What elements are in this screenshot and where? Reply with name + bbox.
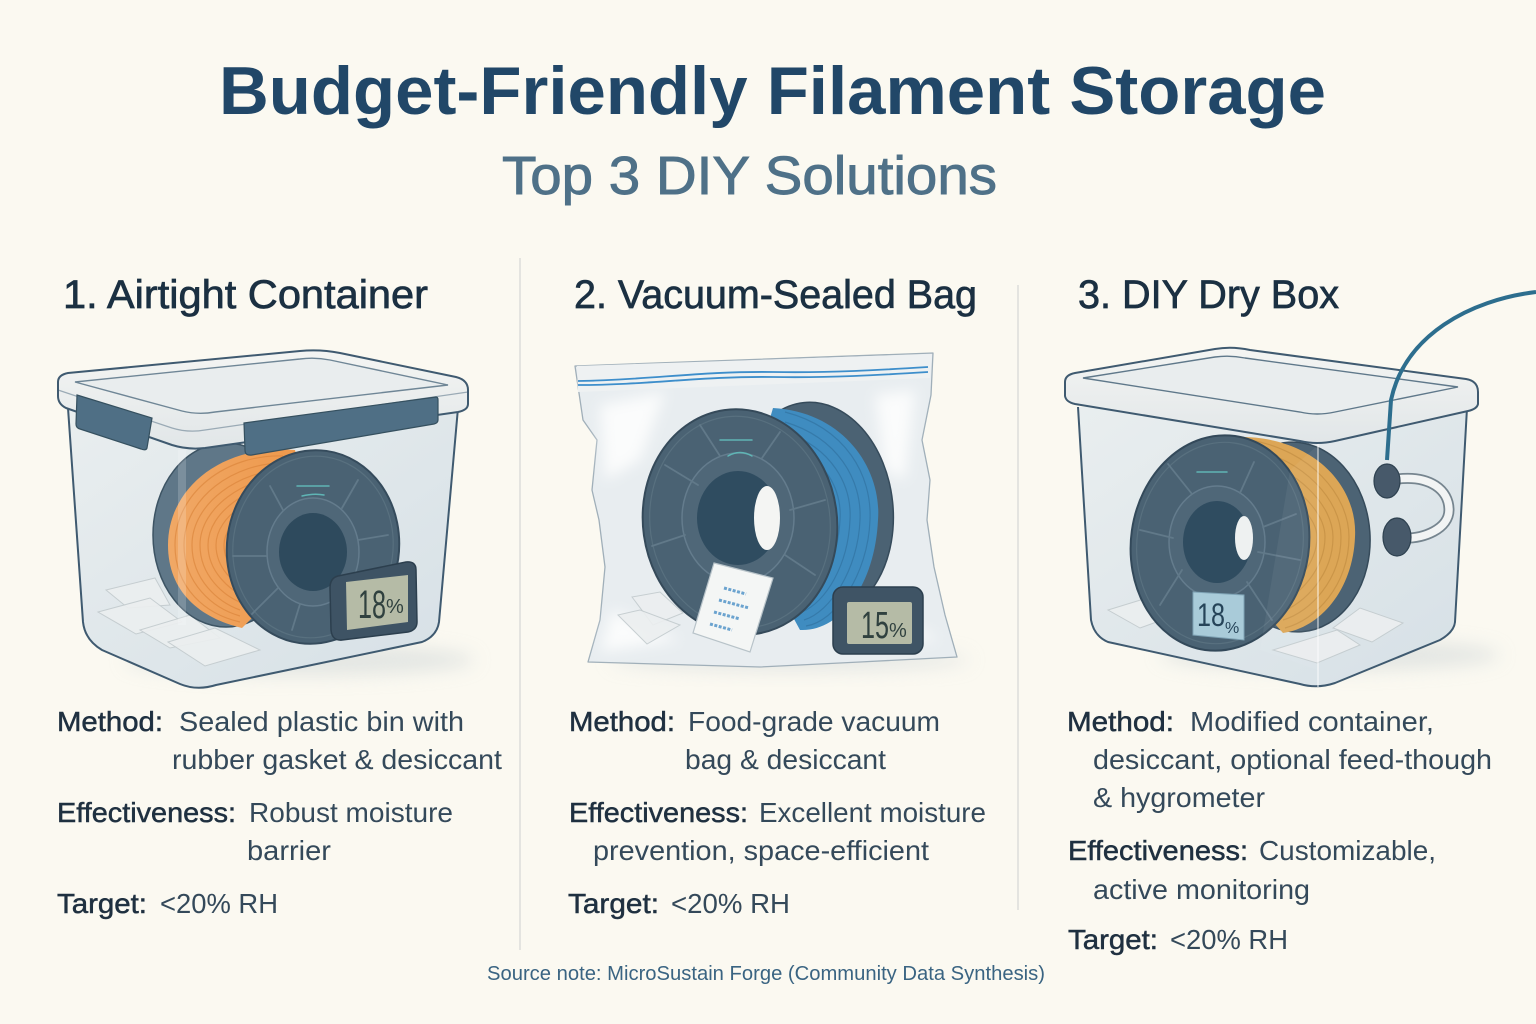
effectiveness text: Effectiveness: bbox=[57, 797, 236, 828]
effectiveness text bbox=[57, 797, 453, 866]
effectiveness text bbox=[569, 797, 986, 866]
effectiveness text bbox=[1068, 835, 1436, 905]
hygrometer: 15% bbox=[833, 587, 923, 654]
effectiveness text: Robust moisture bbox=[249, 797, 453, 828]
illustration: dry box with yellow spool bbox=[1065, 292, 1536, 687]
large desiccant pack bbox=[693, 563, 773, 652]
clasp: left bbox=[76, 395, 152, 450]
method text: Modified container, bbox=[1190, 706, 1434, 737]
heading: DIY dry box: 3. DIY Dry Box bbox=[1078, 273, 1339, 317]
method text: Food-grade vacuum bbox=[688, 706, 940, 737]
heading: vacuum-sealed bag: 2. Vacuum-Sealed Bag bbox=[574, 273, 977, 317]
orange filament spool bbox=[153, 439, 412, 655]
spool display: 18%: 18 bbox=[1197, 597, 1225, 633]
panel: vacuum-sealed bag bbox=[568, 273, 986, 919]
panel: DIY dry box bbox=[1065, 273, 1536, 955]
subtitle: Top 3 DIY Solutions bbox=[502, 146, 997, 206]
method text bbox=[569, 706, 940, 775]
method text: Method: bbox=[1067, 706, 1174, 737]
illustration: airtight container with orange spool bbox=[58, 350, 475, 688]
target text bbox=[57, 888, 278, 919]
bag bbox=[575, 353, 957, 667]
method text: desiccant, optional feed-though bbox=[1093, 744, 1492, 775]
lid bbox=[58, 350, 468, 449]
title: Budget-Friendly Filament Storage bbox=[219, 53, 1326, 129]
effectiveness text: Customizable, bbox=[1259, 835, 1436, 866]
target text: Target: bbox=[568, 888, 659, 919]
method text bbox=[1067, 706, 1492, 813]
effectiveness text: active monitoring bbox=[1093, 874, 1310, 905]
spool display: 18% bbox=[1193, 592, 1244, 640]
desiccant sachets bbox=[618, 592, 683, 644]
hygrometer: 18%: % bbox=[386, 596, 404, 618]
method text: Method: bbox=[57, 706, 163, 737]
spool display: 18%: % bbox=[1225, 620, 1239, 637]
effectiveness text: Excellent moisture bbox=[759, 797, 986, 828]
method text: Sealed plastic bin with bbox=[179, 706, 464, 737]
effectiveness text: barrier bbox=[247, 835, 331, 866]
illustration: vacuum bag with blue spool bbox=[575, 353, 970, 672]
target text bbox=[568, 888, 790, 919]
effectiveness text: Effectiveness: bbox=[1068, 835, 1248, 866]
target text: <20% RH bbox=[160, 888, 278, 919]
method text: bag & desiccant bbox=[685, 744, 886, 775]
target text bbox=[1068, 924, 1288, 955]
feed-through tube bbox=[1374, 464, 1449, 556]
hygrometer: 15%: % bbox=[889, 620, 907, 642]
hygrometer: 18% bbox=[330, 562, 417, 640]
desiccant sachets bbox=[98, 578, 260, 666]
method text: rubber gasket & desiccant bbox=[172, 744, 502, 775]
rim bbox=[1065, 348, 1478, 443]
target text: <20% RH bbox=[671, 888, 790, 919]
hygrometer: 18%: 18 bbox=[358, 583, 386, 627]
method text: Method: bbox=[569, 706, 675, 737]
method text bbox=[57, 706, 502, 775]
source note: Source note: MicroSustain Forge (Community Data Synthesis) bbox=[487, 963, 1045, 985]
yellow filament spool bbox=[1117, 424, 1376, 662]
power cable bbox=[1387, 292, 1536, 460]
panel: airtight container bbox=[57, 273, 502, 919]
target text: Target: bbox=[1068, 924, 1158, 955]
effectiveness text: prevention, space-efficient bbox=[593, 835, 929, 866]
heading: airtight container: 1. Airtight Container bbox=[63, 273, 428, 317]
blue filament spool bbox=[628, 394, 904, 647]
target text: Target: bbox=[57, 888, 147, 919]
method text: & hygrometer bbox=[1093, 782, 1265, 813]
effectiveness text: Effectiveness: bbox=[569, 797, 748, 828]
desiccant sachets bbox=[1108, 598, 1403, 663]
target text: <20% RH bbox=[1170, 924, 1288, 955]
clasp: right bbox=[244, 397, 438, 455]
zip seal lines bbox=[578, 367, 928, 385]
hygrometer: 15%: 15 bbox=[861, 605, 889, 647]
